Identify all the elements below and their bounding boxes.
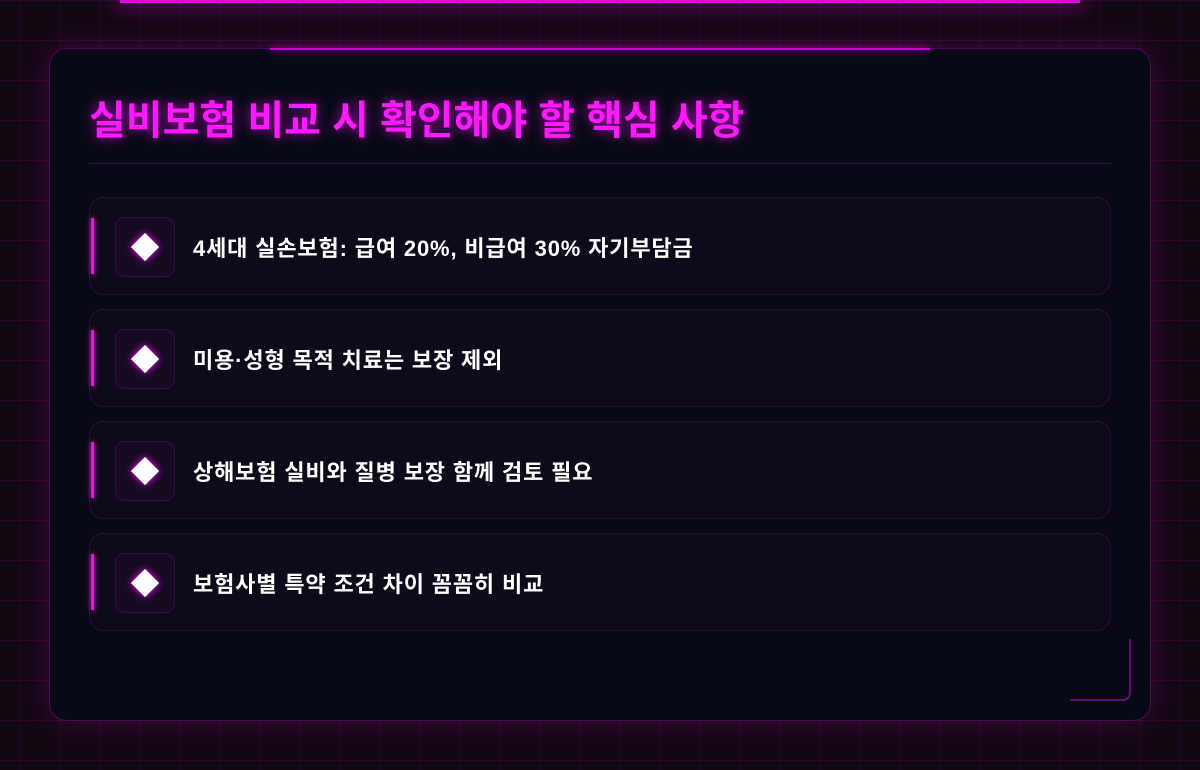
item 3 xyxy=(89,421,1111,519)
text: 상해보험 실비와 질병 보장 함께 검토 필요 xyxy=(193,460,593,485)
icon: diamond xyxy=(115,329,175,389)
icon: diamond xyxy=(115,217,175,277)
title: 실비보험 비교 시 확인해야 할 핵심 사항 xyxy=(89,99,744,143)
text: 보험사별 특약 조건 차이 꼼꼼히 비교 xyxy=(193,572,544,597)
item 2 xyxy=(89,309,1111,407)
text: 미용·성형 목적 치료는 보장 제외 xyxy=(193,348,503,373)
icon: diamond xyxy=(115,441,175,501)
item 4 xyxy=(89,533,1111,631)
icon: diamond xyxy=(115,553,175,613)
item 1 xyxy=(89,197,1111,295)
text: 4세대 실손보험: 급여 20%, 비급여 30% 자기부담금 xyxy=(193,236,694,261)
